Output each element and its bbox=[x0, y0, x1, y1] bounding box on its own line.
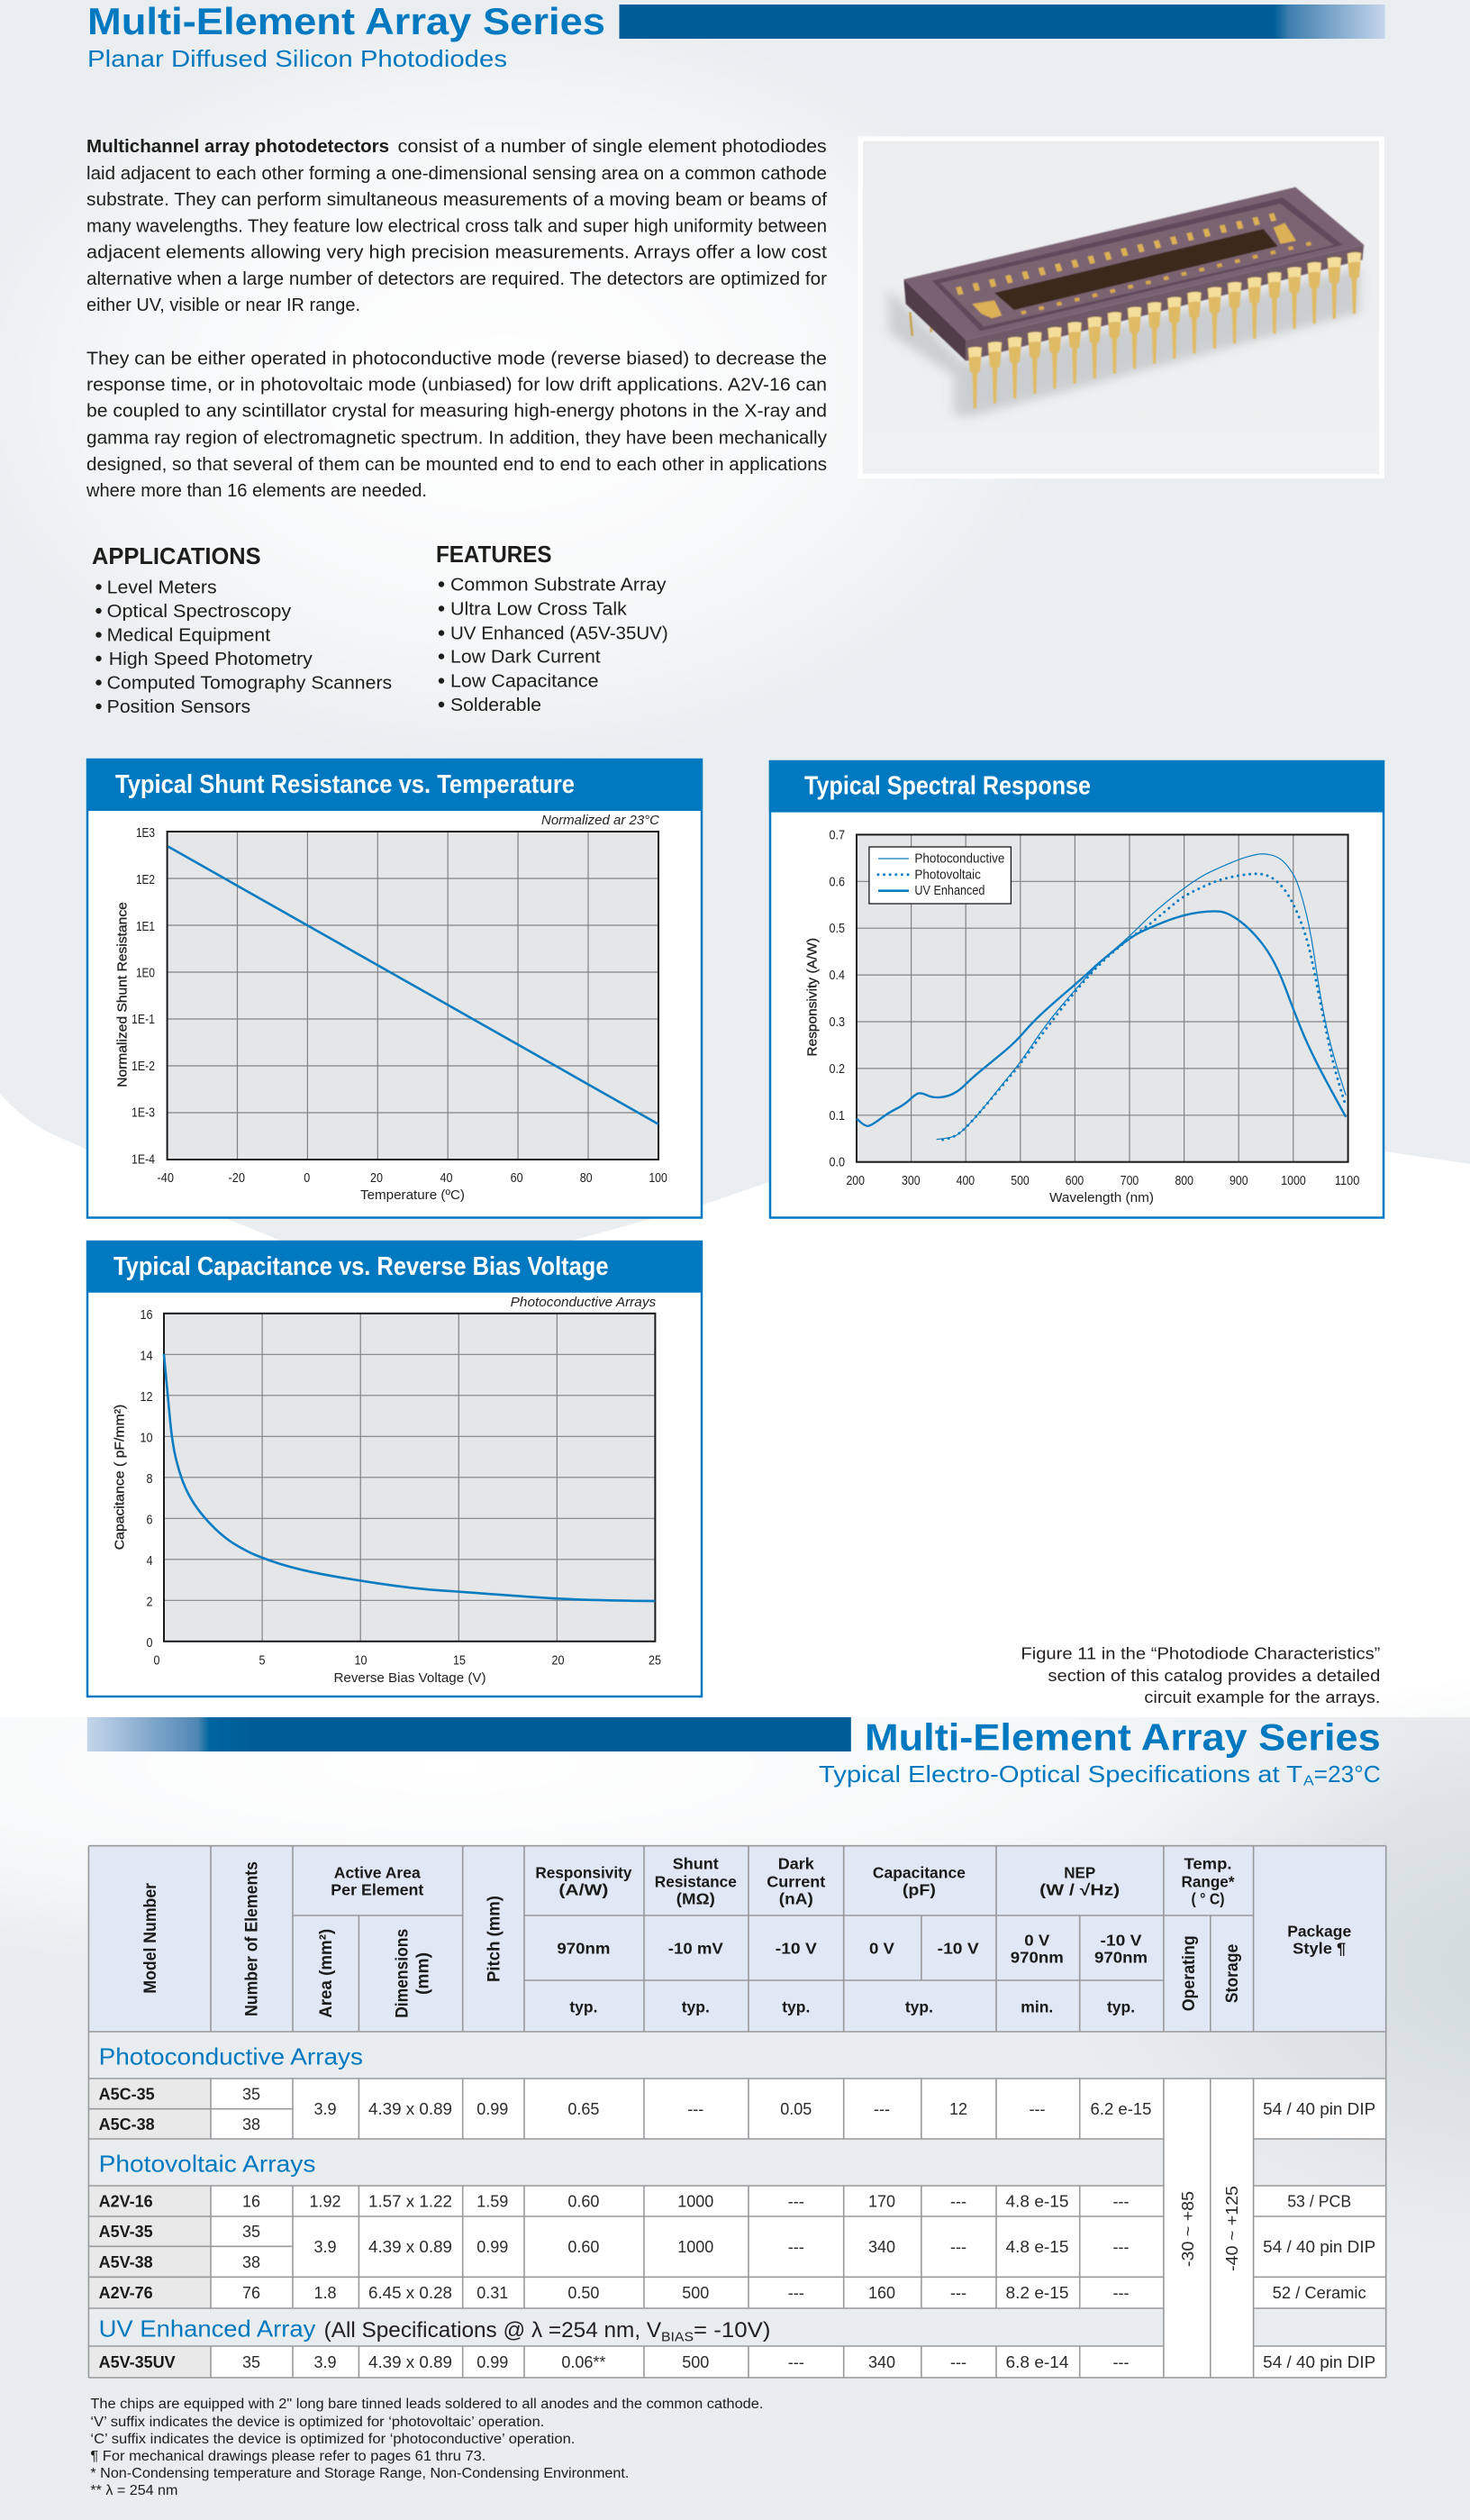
callout: figure 11 reference bbox=[1021, 1644, 1380, 1706]
table column headers: 970nm bbox=[1094, 1949, 1148, 1967]
table column headers: -10 V bbox=[776, 1939, 817, 1957]
table column headers: typ. bbox=[682, 1998, 710, 2016]
y axis tick labels: 1E-2 bbox=[132, 1060, 155, 1074]
row: UV enhanced array: A5V-35UV bbox=[99, 2353, 176, 2371]
rows: photovoltaic arrays: 4.8 e-15 bbox=[1005, 2193, 1068, 2211]
title: Multi-Element Array Series: Multi-Element Array Series bbox=[87, 0, 605, 42]
rows: photovoltaic arrays: 160 bbox=[868, 2284, 895, 2302]
x axis title: Wavelength (nm) bbox=[1049, 1190, 1154, 1205]
photo: detector array chip in DIP package bbox=[858, 137, 1384, 478]
text block: introduction paragraph 2: where more than 16 elements are needed. bbox=[86, 481, 427, 501]
section heading: UV enhanced array bbox=[99, 2315, 771, 2344]
rows: photovoltaic arrays: 0.31 bbox=[476, 2284, 508, 2302]
text block: introduction paragraph 1: laid adjacent to each other forming a one-dimensional sensing area on a common cathode bbox=[86, 164, 827, 184]
list items: applications: High Speed Photometry bbox=[109, 650, 313, 669]
rows: photovoltaic arrays: --- bbox=[950, 2238, 966, 2256]
table column headers: (MΩ) bbox=[676, 1890, 715, 1908]
legend: Photovoltaic bbox=[914, 868, 981, 882]
rows: photovoltaic arrays: 0.60 bbox=[567, 2238, 599, 2256]
y axis tick labels: 8 bbox=[146, 1472, 153, 1487]
rows: photoconductive arrays: 38 bbox=[242, 2115, 260, 2133]
rows: photovoltaic arrays: 76 bbox=[242, 2284, 260, 2302]
table column headers: Area (mm²) bbox=[317, 1929, 336, 2018]
x axis tick labels bbox=[846, 1174, 1359, 1188]
table column headers: Per Element bbox=[331, 1880, 423, 1898]
rows: photovoltaic arrays: 1.57 x 1.22 bbox=[368, 2193, 452, 2211]
y axis tick labels: 16 bbox=[141, 1308, 153, 1323]
x axis tick labels: 1000 bbox=[1281, 1174, 1306, 1188]
y axis tick labels: 10 bbox=[141, 1431, 153, 1445]
table column headers bbox=[141, 1854, 1351, 2018]
table column headers: Capacitance bbox=[873, 1863, 966, 1881]
rows: photoconductive arrays: A5C-35 bbox=[99, 2085, 155, 2103]
text block: introduction paragraph 2: be coupled to any scintillator crystal for measuring high-energy photons in the X-ray and bbox=[86, 402, 827, 422]
footnotes: ‘C’ suffix indicates the device is optimized for ‘photoconductive’ operation. bbox=[90, 2432, 575, 2447]
table column headers: Number of Elements bbox=[243, 1861, 262, 2016]
list items: features: Common Substrate Array bbox=[450, 575, 667, 595]
merged cells: temperature ranges bbox=[1179, 2186, 1241, 2271]
table column headers: Temp. bbox=[1184, 1854, 1232, 1872]
y axis tick labels: 0.6 bbox=[829, 875, 845, 889]
y axis tick labels bbox=[132, 826, 155, 1168]
y axis tick labels: 0 bbox=[146, 1636, 153, 1651]
background: page 2 bbox=[0, 1559, 1470, 2520]
note: normalized: Normalized ar 23°C bbox=[541, 814, 660, 828]
header bar bbox=[620, 5, 1385, 39]
features list bbox=[436, 541, 668, 715]
table column headers: Operating bbox=[1180, 1935, 1199, 2011]
table: electro-optical specifications bbox=[88, 1846, 1386, 2378]
text block: introduction paragraph 1: consist of a number of single element photodiodes bbox=[398, 137, 827, 157]
rows: photovoltaic arrays: --- bbox=[950, 2193, 966, 2211]
rows: photovoltaic arrays: 3.9 bbox=[313, 2238, 337, 2256]
row: UV enhanced array: --- bbox=[1113, 2353, 1129, 2371]
heading: shunt chart: Typical Shunt Resistance vs. Temperature bbox=[115, 770, 575, 799]
footnotes: ¶ For mechanical drawings please refer to pages 61 thru 73. bbox=[90, 2449, 485, 2464]
legend: UV Enhanced bbox=[914, 884, 985, 898]
row: UV enhanced array: --- bbox=[788, 2353, 804, 2371]
row: UV enhanced array: 3.9 bbox=[313, 2353, 337, 2371]
heading: spectral chart: Typical Spectral Response bbox=[804, 772, 1091, 801]
table column headers: 970nm bbox=[1011, 1949, 1064, 1967]
x axis tick labels: 25 bbox=[649, 1654, 661, 1669]
text block: introduction paragraph 1: many wavelengths. They feature low electrical cross talk and super high uniformity between bbox=[86, 216, 827, 236]
rows: photoconductive arrays: 3.9 bbox=[313, 2100, 337, 2118]
y axis title: Capacitance ( pF/mm²) bbox=[112, 1405, 127, 1550]
row: UV enhanced array: 6.8 e-14 bbox=[1005, 2353, 1068, 2371]
table column headers: Storage bbox=[1223, 1944, 1242, 2003]
rows: photovoltaic arrays: A2V-76 bbox=[99, 2284, 153, 2302]
text block: introduction paragraph 1: Multichannel array photodetectors bbox=[86, 137, 389, 157]
table column headers: -10 V bbox=[938, 1939, 979, 1957]
rows: photovoltaic arrays: 500 bbox=[682, 2284, 709, 2302]
list items: applications: Computed Tomography Scanners bbox=[107, 674, 392, 694]
x axis tick labels: 80 bbox=[580, 1171, 593, 1186]
x axis tick labels: -40 bbox=[158, 1171, 174, 1186]
section heading: UV enhanced array: BIAS bbox=[661, 2330, 694, 2344]
x axis tick labels: 0 bbox=[304, 1171, 310, 1186]
table column headers: Pitch (mm) bbox=[485, 1896, 504, 1982]
table column headers: Dimensions bbox=[393, 1929, 412, 2018]
footnotes bbox=[90, 2397, 763, 2498]
x axis title: Temperature (ºC) bbox=[360, 1187, 465, 1203]
section heading: UV enhanced array: (All Specifications @ λ =254 nm, V bbox=[324, 2318, 661, 2343]
rows: photoconductive arrays: 4.39 x 0.89 bbox=[368, 2100, 452, 2118]
x axis tick labels: 700 bbox=[1121, 1174, 1139, 1188]
y axis tick labels: 1E-1 bbox=[132, 1013, 155, 1027]
header bar: page 2 bbox=[87, 1717, 851, 1751]
subtitle: Planar Diffused Silicon Photodiodes bbox=[87, 45, 507, 72]
table column headers: ( ° C) bbox=[1191, 1890, 1225, 1908]
list items: applications: Medical Equipment bbox=[107, 626, 271, 646]
list items: features: Low Dark Current bbox=[450, 648, 601, 668]
rows: photovoltaic arrays: 8.2 e-15 bbox=[1005, 2284, 1068, 2302]
y axis tick labels: 0.3 bbox=[829, 1015, 845, 1030]
rows: photovoltaic arrays: 35 bbox=[242, 2223, 260, 2241]
heading: features: FEATURES bbox=[436, 541, 551, 568]
y axis tick labels: 1E1 bbox=[136, 920, 155, 934]
x axis tick labels: 0 bbox=[153, 1654, 160, 1669]
text block: introduction paragraph 1: adjacent elements allowing very high precision measurements. Arrays offer a low cost bbox=[86, 243, 827, 263]
rows: photovoltaic arrays: 38 bbox=[242, 2253, 260, 2271]
curve: photoconductive bbox=[937, 854, 1346, 1140]
rows: photoconductive arrays: --- bbox=[1030, 2100, 1045, 2118]
y axis tick labels: 0.5 bbox=[829, 922, 845, 936]
rows: photoconductive arrays bbox=[99, 2085, 1375, 2133]
table column headers: Responsivity bbox=[535, 1863, 632, 1881]
rows: photovoltaic arrays: 0.60 bbox=[567, 2193, 599, 2211]
table column headers: Resistance bbox=[655, 1872, 737, 1890]
table column headers: typ. bbox=[905, 1998, 933, 2016]
subtitle: specifications: Typical Electro-Optical Specifications at T bbox=[819, 1760, 1302, 1788]
table column headers: -10 V bbox=[1101, 1931, 1142, 1949]
y axis tick labels: 1E0 bbox=[136, 966, 155, 980]
table column headers: typ. bbox=[1107, 1998, 1135, 2016]
footnotes: * Non-Condensing temperature and Storage Range, Non-Condensing Environment. bbox=[90, 2466, 629, 2481]
table header fill bbox=[88, 1846, 1386, 2032]
x axis tick labels: 15 bbox=[453, 1654, 466, 1669]
rows: photovoltaic arrays: 6.45 x 0.28 bbox=[368, 2284, 452, 2302]
x axis tick labels: 10 bbox=[355, 1654, 368, 1669]
y axis tick labels: 0.0 bbox=[829, 1155, 845, 1169]
x axis tick labels: 300 bbox=[902, 1174, 921, 1188]
rows: photovoltaic arrays: --- bbox=[1113, 2193, 1129, 2211]
rows: photovoltaic arrays: 0.50 bbox=[567, 2284, 599, 2302]
x axis tick labels bbox=[158, 1171, 667, 1186]
x axis tick labels: 100 bbox=[649, 1171, 667, 1186]
x axis tick labels: 20 bbox=[551, 1654, 564, 1669]
rows: photovoltaic arrays: 4.39 x 0.89 bbox=[368, 2238, 452, 2256]
y axis tick labels: 0.7 bbox=[829, 828, 845, 842]
rows: photovoltaic arrays: A2V-16 bbox=[99, 2193, 153, 2211]
table column headers: min. bbox=[1021, 1998, 1053, 2016]
rows: photovoltaic arrays: 1000 bbox=[677, 2193, 713, 2211]
section heading: photovoltaic arrays: Photovoltaic Arrays bbox=[99, 2151, 315, 2178]
rows: photovoltaic arrays: 170 bbox=[868, 2193, 895, 2211]
y axis tick labels: 0.1 bbox=[829, 1109, 845, 1124]
title: page 2: Multi-Element Array Series bbox=[865, 1715, 1381, 1758]
text block: introduction paragraph 1: substrate. They can perform simultaneous measurements of a moving beam or beams of bbox=[86, 190, 827, 210]
list items: applications: Optical Spectroscopy bbox=[107, 602, 291, 622]
y axis tick labels: 2 bbox=[146, 1595, 153, 1609]
x axis tick labels: 1100 bbox=[1335, 1174, 1359, 1188]
table column headers: (pF) bbox=[903, 1880, 936, 1898]
table column headers: 0 V bbox=[1024, 1931, 1050, 1949]
table column headers: Style ¶ bbox=[1293, 1940, 1346, 1958]
panel: capacitance vs reverse bias voltage bbox=[86, 1241, 703, 1697]
table column headers: Active Area bbox=[334, 1863, 421, 1881]
rows: photovoltaic arrays: 1.92 bbox=[309, 2193, 341, 2211]
x axis tick labels: 60 bbox=[511, 1171, 523, 1186]
heading: capacitance chart: Typical Capacitance vs. Reverse Bias Voltage bbox=[113, 1252, 609, 1281]
text block: introduction paragraph 2 bbox=[86, 349, 827, 501]
y axis tick labels: 1E-4 bbox=[132, 1153, 155, 1168]
y axis tick labels: 0.2 bbox=[829, 1062, 845, 1077]
text block: introduction paragraph 1: alternative when a large number of detectors are required. The detectors are optimized for bbox=[86, 269, 827, 289]
x axis tick labels: 500 bbox=[1011, 1174, 1030, 1188]
table column headers: Model Number bbox=[141, 1882, 160, 1994]
text block: introduction paragraph 2: response time, or in photovoltaic mode (unbiased) for low drift applications. A2V-16 can bbox=[86, 375, 827, 395]
curve: UV enhanced bbox=[857, 911, 1346, 1126]
line chart: capacitance bbox=[164, 1314, 655, 1642]
y axis tick labels bbox=[829, 828, 845, 1169]
row: UV enhanced array: 54 / 40 pin DIP bbox=[1263, 2353, 1375, 2371]
list items: applications bbox=[95, 578, 392, 717]
row: UV enhanced array: 0.06** bbox=[561, 2353, 605, 2371]
legend: Photoconductive bbox=[914, 851, 1004, 866]
text block: introduction paragraph 1 bbox=[86, 137, 827, 315]
row: UV enhanced array: --- bbox=[950, 2353, 966, 2371]
table column headers: Package bbox=[1287, 1922, 1351, 1940]
rows: photovoltaic arrays: 1000 bbox=[677, 2238, 713, 2256]
callout: figure 11 reference: Figure 11 in the “Photodiode Characteristics” bbox=[1021, 1644, 1380, 1663]
table column headers: (A/W) bbox=[558, 1880, 608, 1898]
table column headers: Current bbox=[767, 1872, 825, 1890]
list items: applications: Level Meters bbox=[107, 578, 217, 598]
rows: photoconductive arrays: 12 bbox=[949, 2100, 967, 2118]
y axis tick labels: 1E-3 bbox=[132, 1106, 155, 1121]
text block: introduction paragraph 2: gamma ray region of electromagnetic spectrum. In addition, they have been mechanically bbox=[86, 429, 827, 449]
table column headers: (mm) bbox=[413, 1952, 432, 1995]
row: UV enhanced array: 0.99 bbox=[476, 2353, 508, 2371]
merged cells: temperature ranges: -40 ~ +125 bbox=[1223, 2186, 1241, 2271]
table column headers: Dark bbox=[778, 1854, 814, 1872]
y axis tick labels bbox=[141, 1308, 153, 1651]
x axis title: Reverse Bias Voltage (V) bbox=[333, 1670, 486, 1686]
x axis tick labels: 600 bbox=[1066, 1174, 1084, 1188]
x axis tick labels bbox=[153, 1654, 661, 1669]
table column headers: 970nm bbox=[557, 1939, 610, 1957]
y axis tick labels: 0.4 bbox=[829, 969, 845, 983]
y axis tick labels: 14 bbox=[141, 1350, 153, 1364]
rows: photoconductive arrays: 6.2 e-15 bbox=[1090, 2100, 1151, 2118]
rows: photovoltaic arrays: --- bbox=[950, 2284, 966, 2302]
curve: photovoltaic bbox=[943, 874, 1346, 1140]
table column headers: typ. bbox=[569, 1998, 597, 2016]
y axis tick labels: 6 bbox=[146, 1514, 153, 1528]
legend bbox=[869, 847, 1011, 904]
section heading: photoconductive arrays: Photoconductive Arrays bbox=[99, 2043, 363, 2070]
x axis tick labels: 400 bbox=[957, 1174, 975, 1188]
rows: photovoltaic arrays: 1.8 bbox=[313, 2284, 337, 2302]
callout: figure 11 reference: circuit example for the arrays. bbox=[1144, 1688, 1380, 1706]
row: UV enhanced array: 4.39 x 0.89 bbox=[368, 2353, 452, 2371]
rows: photovoltaic arrays: 340 bbox=[868, 2238, 895, 2256]
rows: photoconductive arrays: 0.65 bbox=[567, 2100, 599, 2118]
rows: photovoltaic arrays: 54 / 40 pin DIP bbox=[1263, 2238, 1375, 2256]
rows: photovoltaic arrays: --- bbox=[788, 2238, 804, 2256]
rows: photoconductive arrays: 0.05 bbox=[780, 2100, 812, 2118]
rows: photovoltaic arrays: A5V-35 bbox=[99, 2223, 153, 2241]
list items: features: Solderable bbox=[450, 696, 541, 715]
footnotes: The chips are equipped with 2" long bare tinned leads soldered to all anodes and the common cathode. bbox=[90, 2397, 763, 2412]
rows: photovoltaic arrays: A5V-38 bbox=[99, 2253, 153, 2271]
footnotes: ‘V’ suffix indicates the device is optimized for ‘photovoltaic’ operation. bbox=[90, 2415, 544, 2430]
rows: photovoltaic arrays: 52 / Ceramic bbox=[1273, 2284, 1366, 2302]
background: page 1 bbox=[0, 0, 1470, 1717]
line chart: shunt resistance bbox=[168, 832, 658, 1160]
icon: chip illustration bbox=[887, 187, 1364, 417]
rows: photovoltaic arrays: 1.59 bbox=[476, 2193, 508, 2211]
y axis tick labels: 4 bbox=[146, 1554, 153, 1569]
rows: photovoltaic arrays: 4.8 e-15 bbox=[1005, 2238, 1068, 2256]
rows: photovoltaic arrays: 16 bbox=[242, 2193, 260, 2211]
table column headers: Range* bbox=[1182, 1872, 1235, 1890]
text block: introduction paragraph 2: designed, so that several of them can be mounted end to end to each other in applications bbox=[86, 455, 827, 475]
rows: photovoltaic arrays: --- bbox=[1113, 2238, 1129, 2256]
panel: spectral response bbox=[769, 760, 1384, 1218]
subtitle: specifications: A bbox=[1303, 1774, 1314, 1789]
x axis tick labels: 40 bbox=[440, 1171, 452, 1186]
list items: applications: Position Sensors bbox=[107, 697, 250, 717]
footnotes: ** λ = 254 nm bbox=[90, 2483, 177, 2498]
rows: photoconductive arrays: 0.99 bbox=[476, 2100, 508, 2118]
rows: photovoltaic arrays: --- bbox=[1113, 2284, 1129, 2302]
rows: photoconductive arrays: 54 / 40 pin DIP bbox=[1263, 2100, 1375, 2118]
rows: photoconductive arrays: --- bbox=[874, 2100, 890, 2118]
rows: photoconductive arrays: 35 bbox=[242, 2085, 260, 2103]
line chart: responsivity curves bbox=[857, 834, 1348, 1162]
y axis title: Responsivity (A/W) bbox=[805, 938, 821, 1057]
x axis tick labels: 900 bbox=[1230, 1174, 1248, 1188]
y axis tick labels: 1E3 bbox=[136, 826, 155, 841]
note: photoconductive arrays: Photoconductive Arrays bbox=[511, 1296, 656, 1310]
text block: introduction paragraph 2: They can be either operated in photoconductive mode (reverse biased) to decrease the bbox=[86, 349, 827, 368]
rows: photovoltaic arrays: --- bbox=[788, 2193, 804, 2211]
x axis tick labels: 200 bbox=[846, 1174, 865, 1188]
y axis tick labels: 1E2 bbox=[136, 873, 155, 887]
subtitle: specifications: =23°C bbox=[1314, 1760, 1381, 1788]
rows: photovoltaic arrays bbox=[99, 2193, 1375, 2302]
table column headers: NEP bbox=[1064, 1863, 1096, 1881]
list items: features bbox=[439, 575, 668, 715]
table column headers: (W / √Hz) bbox=[1039, 1880, 1120, 1898]
row: UV enhanced array: 500 bbox=[682, 2353, 709, 2371]
table body fills bbox=[88, 2079, 1386, 2378]
x axis tick labels: -20 bbox=[228, 1171, 245, 1186]
section heading: UV enhanced array: UV Enhanced Array bbox=[99, 2315, 315, 2342]
x axis tick labels: 800 bbox=[1175, 1174, 1193, 1188]
callout: figure 11 reference: section of this catalog provides a detailed bbox=[1048, 1666, 1380, 1685]
table column headers: 0 V bbox=[869, 1939, 894, 1957]
rows: photovoltaic arrays: --- bbox=[788, 2284, 804, 2302]
row: UV enhanced array bbox=[99, 2353, 1375, 2371]
row: UV enhanced array: 340 bbox=[868, 2353, 895, 2371]
rows: photovoltaic arrays: 53 / PCB bbox=[1287, 2193, 1351, 2211]
text block: introduction paragraph 1: either UV, visible or near IR range. bbox=[86, 296, 360, 315]
heading: applications: APPLICATIONS bbox=[92, 542, 261, 569]
list items: features: Low Capacitance bbox=[450, 672, 599, 692]
table column headers: Shunt bbox=[673, 1854, 719, 1872]
y axis tick labels: 12 bbox=[141, 1390, 153, 1405]
rows: photoconductive arrays: --- bbox=[687, 2100, 703, 2118]
merged cells: temperature ranges: -30 ~ +85 bbox=[1179, 2191, 1197, 2267]
x axis tick labels: 20 bbox=[370, 1171, 383, 1186]
x axis tick labels: 5 bbox=[259, 1654, 265, 1669]
table column headers: -10 mV bbox=[668, 1939, 723, 1957]
table column headers: typ. bbox=[782, 1998, 810, 2016]
y axis title: Normalized Shunt Resistance bbox=[115, 902, 131, 1087]
list items: features: Ultra Low Cross Talk bbox=[450, 600, 628, 620]
list items: features: UV Enhanced (A5V-35UV) bbox=[450, 624, 668, 644]
table column headers: (nA) bbox=[779, 1890, 813, 1908]
section heading: UV enhanced array: = -10V) bbox=[694, 2318, 771, 2343]
rows: photoconductive arrays: A5C-38 bbox=[99, 2115, 155, 2133]
rows: photovoltaic arrays: 0.99 bbox=[476, 2238, 508, 2256]
panel: shunt resistance vs temperature bbox=[86, 759, 703, 1218]
row: UV enhanced array: 35 bbox=[242, 2353, 260, 2371]
applications list bbox=[92, 542, 392, 717]
